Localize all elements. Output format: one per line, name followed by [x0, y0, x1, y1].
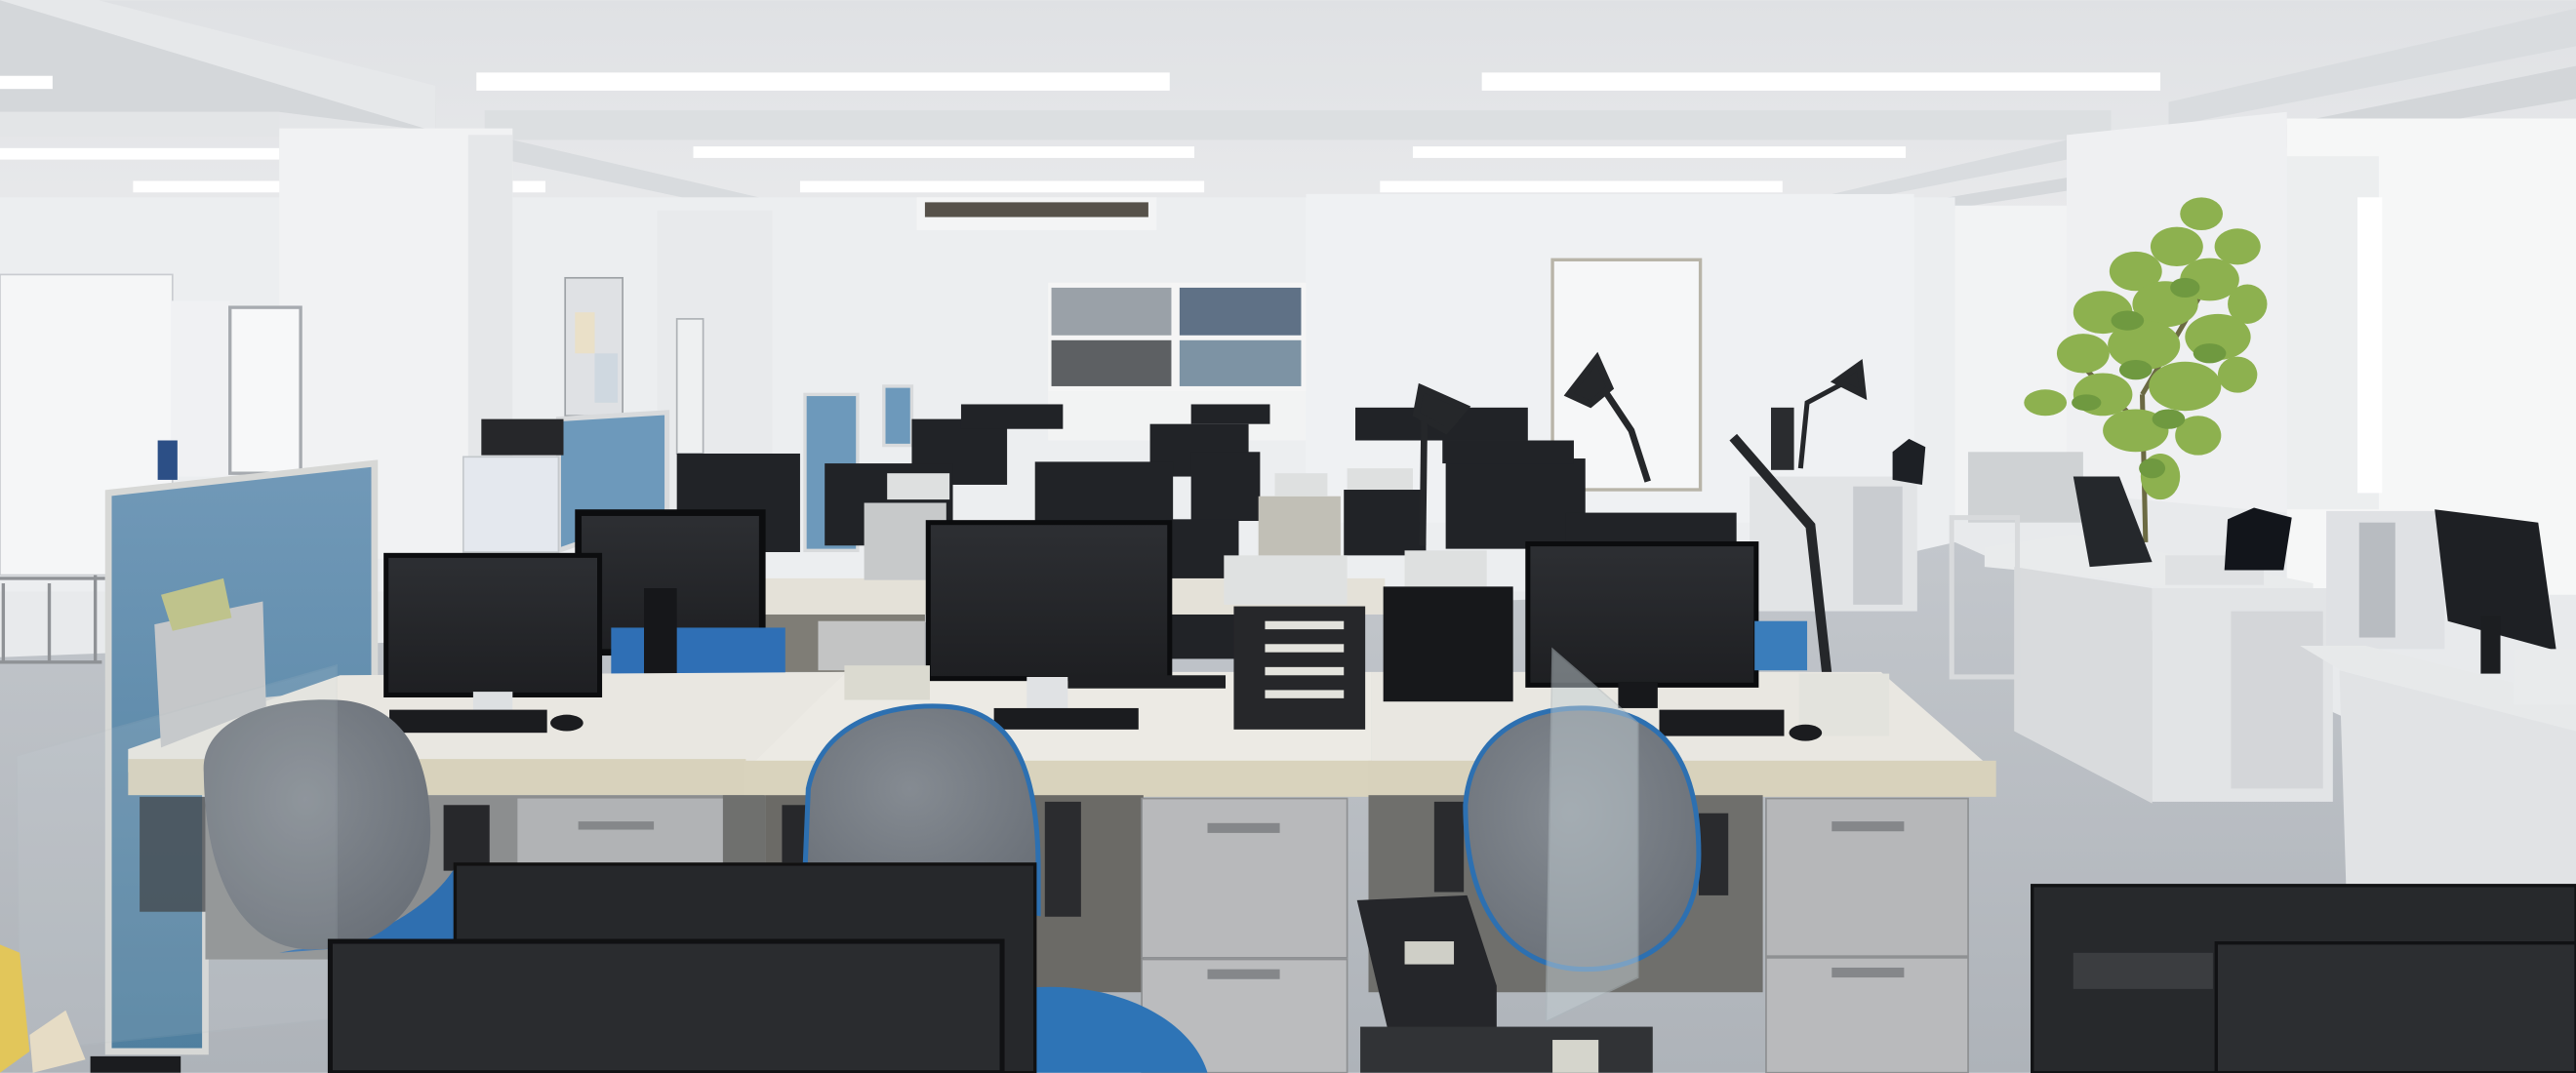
phone on centre stack — [1224, 555, 1348, 605]
floor — [0, 542, 2576, 1073]
door — [1552, 259, 1701, 490]
right chair — [1434, 708, 1728, 970]
document tray — [1233, 607, 1365, 730]
acrylic shield left — [17, 665, 337, 1052]
front monitor right — [1528, 544, 1889, 741]
acrylic shield right — [1546, 649, 1638, 1022]
foreground monitor front — [330, 941, 1002, 1073]
phones on back desks — [865, 468, 1487, 586]
bookshelves — [1048, 283, 1307, 441]
foreground blue chair — [1035, 987, 1208, 1073]
front monitor left — [386, 555, 600, 733]
foreground monitor back — [455, 864, 1035, 1073]
notice board — [565, 278, 623, 416]
whiteboard — [0, 274, 301, 662]
left column — [279, 129, 512, 559]
foreground right monitors — [2033, 886, 2576, 1073]
back desk row — [761, 578, 1385, 672]
front monitor centre — [844, 523, 1226, 730]
black pc tower — [1384, 586, 1513, 701]
front right desk with monitor — [2300, 509, 2576, 887]
foreground papers — [0, 944, 181, 1073]
box file on left desk — [154, 578, 266, 747]
centre chair — [782, 706, 1081, 917]
shelf unit and printer — [463, 419, 564, 552]
main desk tops — [128, 672, 1996, 797]
foreground equipment — [1357, 895, 1653, 1073]
right windows and blinds — [1955, 119, 2576, 595]
ceiling lights — [0, 72, 2160, 192]
back wall — [0, 194, 1955, 591]
ceiling — [0, 0, 2576, 219]
far right desk with monitor — [1750, 408, 1925, 612]
left chair — [140, 699, 490, 953]
far monitors row — [677, 404, 1737, 658]
drawers — [517, 799, 1968, 1073]
air conditioner — [916, 197, 1156, 230]
right side desk — [1952, 452, 2333, 804]
blue partitions — [108, 319, 911, 1052]
under desk shadow — [205, 795, 1763, 992]
desk lamps — [1416, 358, 1863, 674]
mid monitors — [579, 513, 788, 694]
right column — [2067, 112, 2287, 513]
ficus plant — [2024, 197, 2267, 542]
